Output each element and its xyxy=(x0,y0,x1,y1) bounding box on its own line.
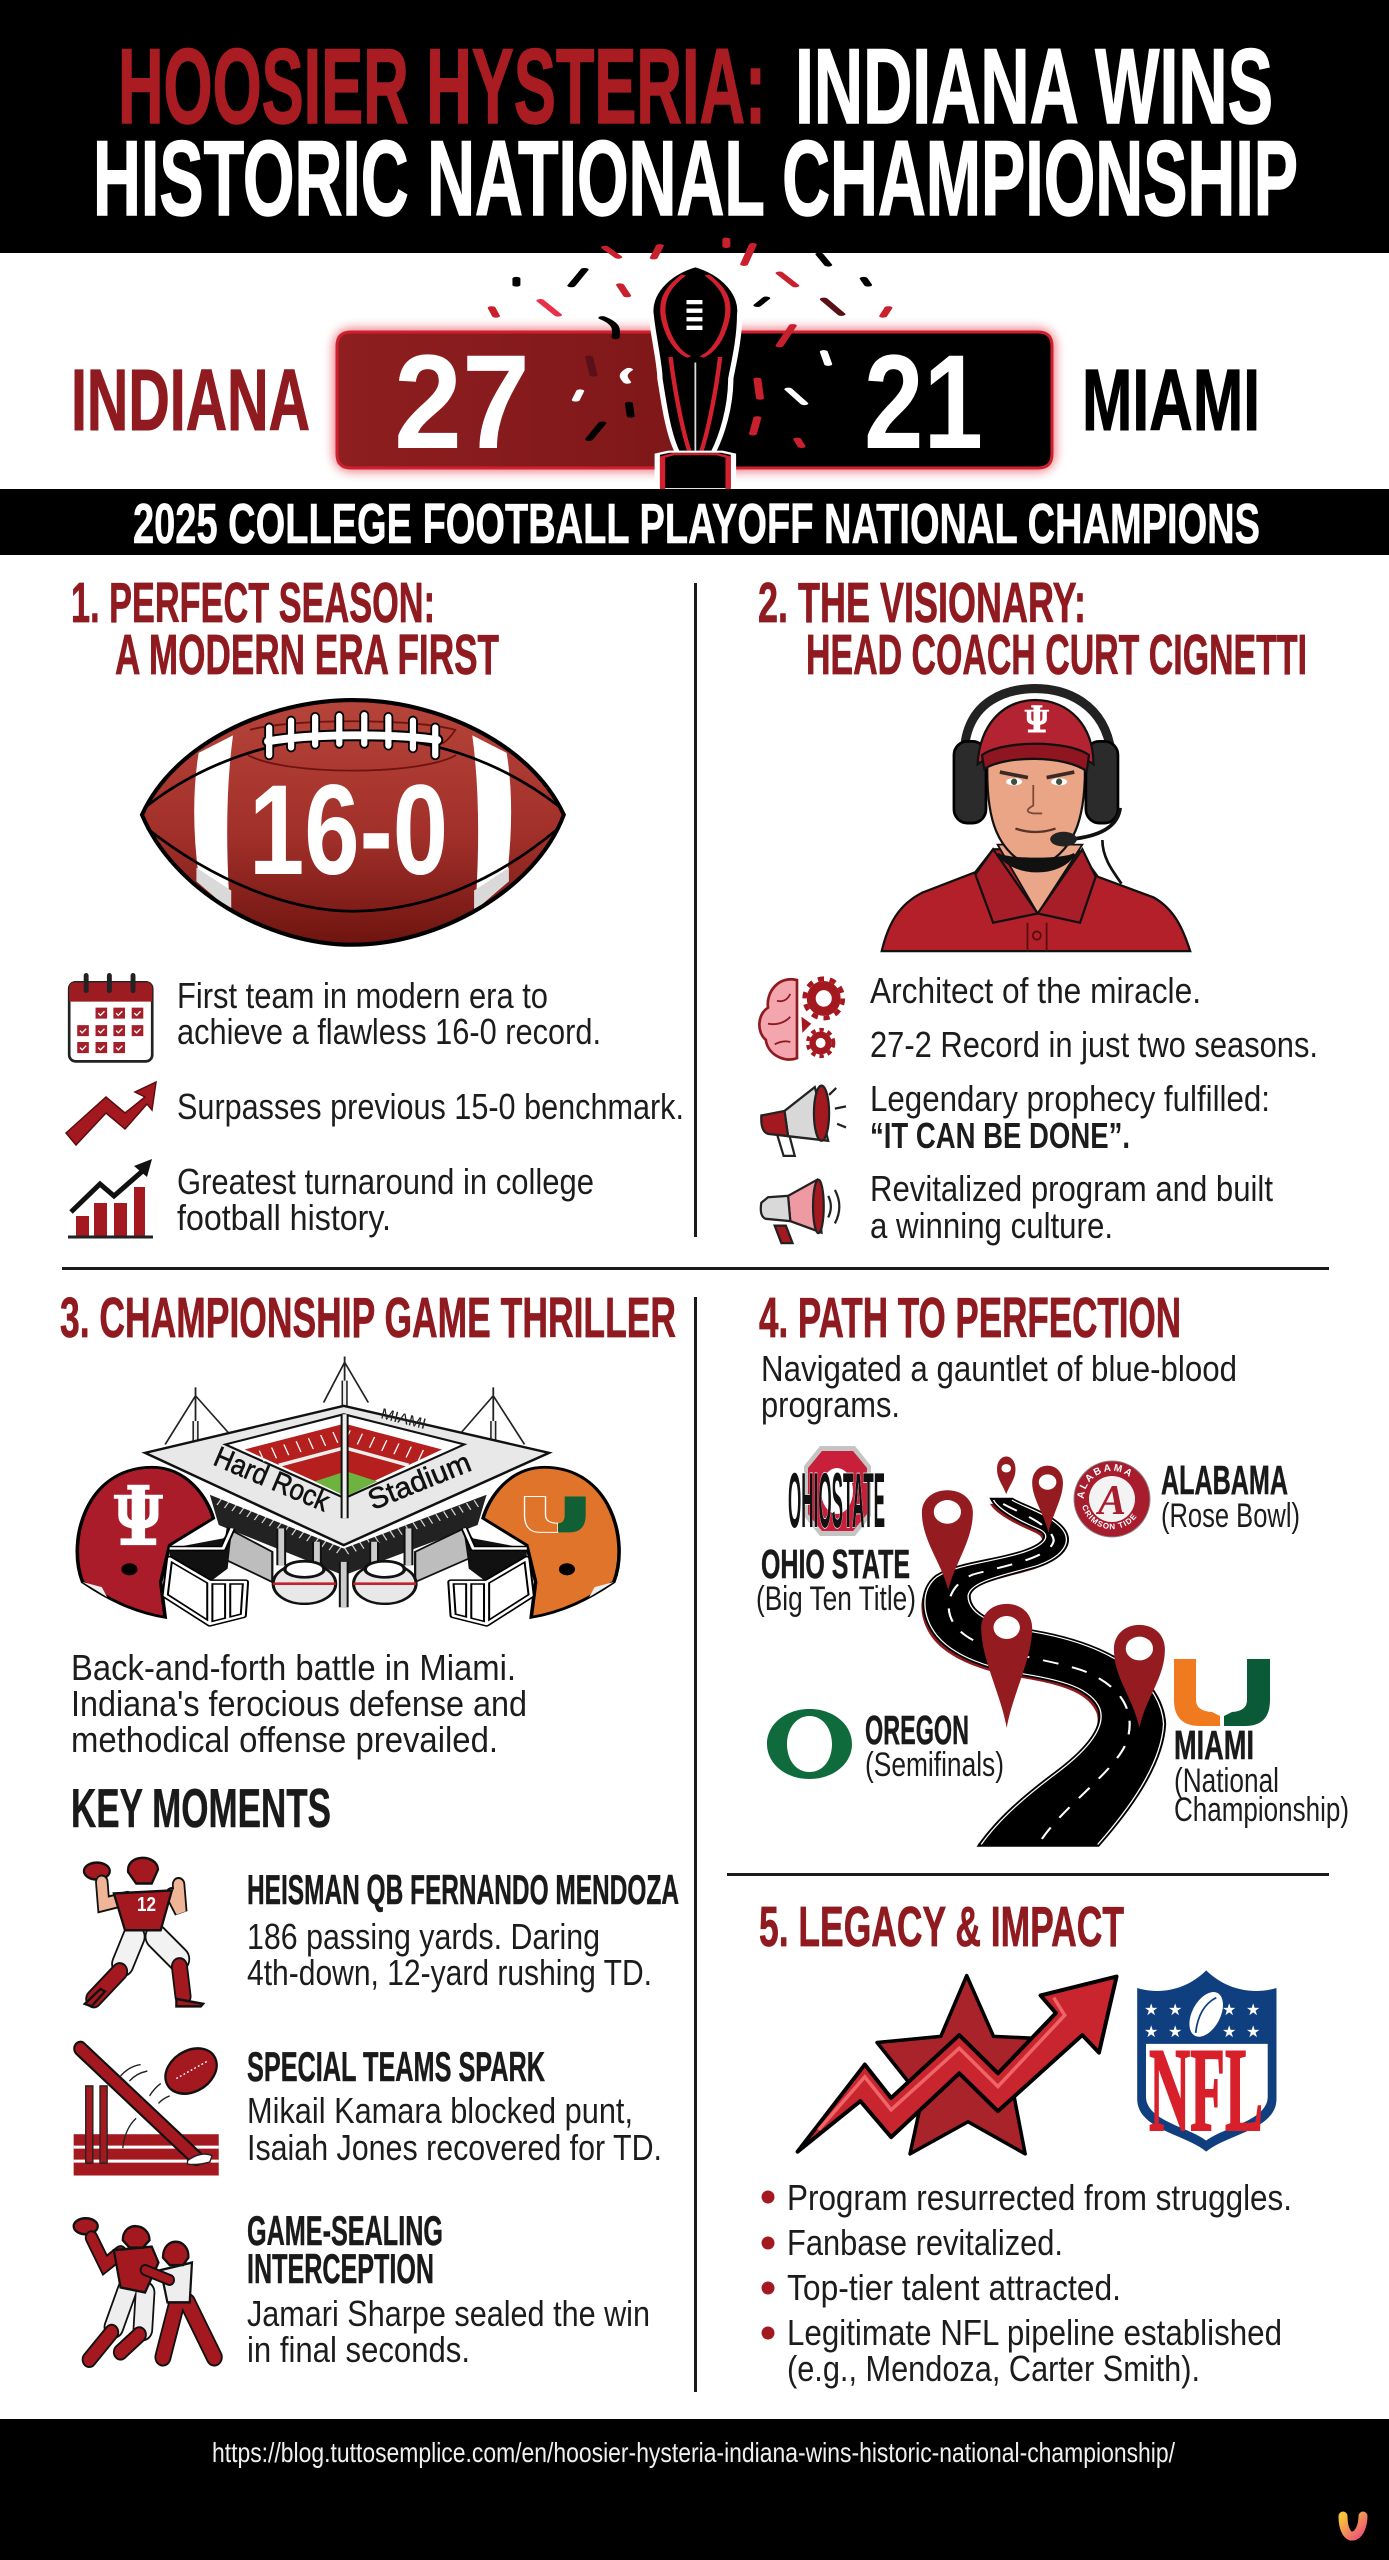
heading: key moments: KEY MOMENTS xyxy=(71,1777,331,1839)
text: revitalized: Revitalized program and built xyxy=(870,1168,1273,1209)
bullet list: Legitimate NFL pipeline established xyxy=(787,2312,1282,2353)
icon: interception players xyxy=(74,2218,214,2360)
logo: Alabama: A xyxy=(1095,1478,1126,1524)
icon: rising arrow xyxy=(66,1082,156,1145)
bullet list: Top-tier talent attracted. xyxy=(787,2267,1121,2308)
icon: bar chart with arrow xyxy=(68,1159,153,1237)
header: title band: HOOSIER HYSTERIA: xyxy=(118,26,766,146)
text: gauntlet: Navigated a gauntlet of blue-blood xyxy=(761,1348,1237,1389)
label: Oregon: OREGON xyxy=(865,1707,969,1753)
label: Alabama: ALABAMA xyxy=(1161,1457,1288,1503)
heading: section 1: A MODERN ERA FIRST xyxy=(115,623,499,687)
text: first team: achieve a flawless 16-0 record. xyxy=(177,1011,601,1052)
moment: Heisman QB: 186 passing yards. Daring xyxy=(247,1916,600,1957)
illustration: stadium and helmets xyxy=(77,1357,619,1624)
icon: football 16-0 xyxy=(142,700,564,945)
panel: championship game thriller xyxy=(60,1286,679,2370)
label: Miami xyxy=(1174,1722,1349,1829)
text: prophecy xyxy=(870,1078,1270,1156)
text: revitalized: a winning culture. xyxy=(870,1205,1113,1246)
moment: game-sealing interception: in final seconds. xyxy=(247,2329,470,2370)
label: Alabama xyxy=(1161,1457,1300,1535)
logo: NFL shield: ★ xyxy=(1168,2024,1182,2041)
label: Ohio State: OHIO STATE xyxy=(761,1541,910,1587)
label: Miami: (National xyxy=(1174,1762,1279,1800)
logo: NFL shield: ★ xyxy=(1168,2002,1182,2019)
score: 21: 21 xyxy=(864,328,983,477)
logo: NFL shield: ★ xyxy=(1222,2002,1236,2019)
moment: special teams: SPECIAL TEAMS SPARK xyxy=(247,2043,545,2090)
text: prophecy: “IT CAN BE DONE”. xyxy=(870,1115,1130,1156)
logo: NFL shield xyxy=(1137,1970,1276,2156)
football score 16-0: 16-0 xyxy=(249,759,448,902)
jersey number 12: 12 xyxy=(137,1894,156,1916)
road map with pins xyxy=(921,1457,1165,1844)
stadium name: Hard Rock: Hard Rock xyxy=(209,1441,334,1518)
heading: section 5: 5. LEGACY & IMPACT xyxy=(759,1895,1124,1959)
header: title band xyxy=(0,0,1389,253)
red helmet facemask xyxy=(165,1528,246,1624)
masts xyxy=(165,1357,525,1453)
icon: star with rising arrow xyxy=(798,1976,1117,2154)
icon: corner logo xyxy=(1343,2516,1363,2536)
text: game summary: Indiana's ferocious defense and xyxy=(71,1683,527,1724)
scoreboard xyxy=(71,239,1260,489)
team name: Miami: MIAMI xyxy=(1082,352,1260,449)
icon: megaphone with rays xyxy=(761,1086,846,1156)
bullet list xyxy=(762,2177,1292,2389)
text: gauntlet: programs. xyxy=(761,1384,900,1425)
text: record: 27-2 Record in just two seasons. xyxy=(870,1024,1318,1065)
red helmet dome xyxy=(77,1467,213,1617)
label: Oregon xyxy=(865,1707,1004,1784)
text: greatest turnaround: Greatest turnaround in college xyxy=(177,1161,594,1202)
text: game summary: methodical offense prevailed. xyxy=(71,1719,498,1760)
confetti xyxy=(492,239,888,446)
moment: game-sealing interception: INTERCEPTION xyxy=(247,2245,434,2292)
score box: Miami side xyxy=(695,332,1052,468)
logo: NFL shield: ★ xyxy=(1222,2024,1236,2041)
bullet list: (e.g., Mendoza, Carter Smith). xyxy=(787,2348,1200,2389)
moment: special teams: Mikail Kamara blocked punt, xyxy=(247,2090,633,2131)
heading: section 1 xyxy=(71,571,499,687)
dividers xyxy=(62,583,1329,2392)
logo: NFL shield: ★ xyxy=(1144,2002,1158,2019)
Miami sign on stadium: MIAMI xyxy=(379,1405,428,1433)
text: first team xyxy=(177,975,601,1052)
text: architect: Architect of the miracle. xyxy=(870,970,1201,1011)
icon: brain and gears xyxy=(759,979,843,1060)
stadium underside xyxy=(210,1495,487,1575)
logo: Miami U xyxy=(1174,1659,1270,1726)
score: 27: 27 xyxy=(394,328,530,477)
moment: Heisman QB xyxy=(247,1866,679,1993)
panel: the visionary xyxy=(758,571,1318,1246)
logo: NFL shield: ★ xyxy=(1144,2024,1158,2041)
panel: path to perfection: OHIOSTATE xyxy=(788,1456,885,1544)
label: Ohio State: (Big Ten Title) xyxy=(756,1580,916,1618)
moment: Heisman QB: 4th-down, 12-yard rushing TD. xyxy=(247,1952,652,1993)
panel: path to perfection xyxy=(756,1286,1349,1847)
logo: Alabama xyxy=(1074,1460,1150,1538)
score box: Indiana side xyxy=(337,332,695,468)
footer xyxy=(0,2419,1389,2560)
bullet list: Program resurrected from struggles. xyxy=(787,2177,1292,2218)
panel: legacy and impact xyxy=(759,1895,1292,2389)
logo: NFL shield: ★ xyxy=(1246,2002,1260,2019)
moment: special teams: Isaiah Jones recovered for TD. xyxy=(247,2127,662,2168)
team name: Indiana: INDIANA xyxy=(71,352,310,449)
stadium name: Stadium: Stadium xyxy=(364,1447,476,1517)
logo: Alabama: ALABAMA xyxy=(1077,1464,1131,1499)
text: game summary: Back-and-forth battle in Miami. xyxy=(71,1647,516,1688)
text: gauntlet xyxy=(761,1348,1237,1425)
text: game summary xyxy=(71,1647,527,1760)
moment: Heisman QB: HEISMAN QB FERNANDO MENDOZA xyxy=(247,1866,679,1913)
icon: calendar xyxy=(69,975,152,1061)
score box glow xyxy=(333,328,1056,472)
moment: game-sealing interception: Jamari Sharpe sealed the win xyxy=(247,2293,650,2334)
label: Ohio State xyxy=(756,1541,916,1618)
logo: Oregon O xyxy=(767,1709,852,1779)
parking rings xyxy=(273,1564,416,1604)
label: Oregon: (Semifinals) xyxy=(865,1746,1004,1784)
moment: special teams xyxy=(247,2043,662,2168)
text: revitalized xyxy=(870,1168,1273,1246)
orange helmet facemask xyxy=(451,1528,531,1624)
icon: megaphone with sound waves xyxy=(761,1180,839,1243)
text: first team: First team in modern era to xyxy=(177,975,548,1016)
icon: quarterback xyxy=(84,1858,203,2006)
bullet list: Fanbase revitalized. xyxy=(787,2222,1063,2263)
text: greatest turnaround: football history. xyxy=(177,1197,391,1238)
text: greatest turnaround xyxy=(177,1161,594,1238)
panel: perfect season xyxy=(66,571,684,1238)
illustration: coach with headset xyxy=(882,689,1190,951)
moment: game-sealing interception xyxy=(247,2207,650,2370)
heading: section 2 xyxy=(758,571,1307,687)
logo: Alabama: CRIMSON TIDE xyxy=(1082,1505,1137,1530)
heading: section 1: 1. PERFECT SEASON: xyxy=(71,571,435,635)
heading: section 2: 2. THE VISIONARY: xyxy=(758,571,1086,635)
logo: NFL shield: ★ xyxy=(1246,2024,1260,2041)
stadium roof xyxy=(145,1406,549,1545)
label: Alabama: (Rose Bowl) xyxy=(1161,1497,1300,1535)
icon: championship trophy xyxy=(651,266,740,489)
heading: section 3: 3. CHAMPIONSHIP GAME THRILLER xyxy=(60,1286,676,1350)
icon: blocked punt xyxy=(74,2040,223,2176)
orange helmet dome xyxy=(483,1467,619,1617)
logo: NFL shield: NFL xyxy=(1149,2023,1263,2156)
text: surpasses: Surpasses previous 15-0 benchmark. xyxy=(177,1086,684,1127)
source URL: https://blog.tuttosemplice.com/en/hoosier-hysteria-indiana-wins-historic-national-championship/ xyxy=(212,2437,1175,2468)
logo: Ohio State xyxy=(788,1446,885,1544)
moment: game-sealing interception: GAME-SEALING xyxy=(247,2207,443,2254)
label: Miami: MIAMI xyxy=(1174,1722,1254,1768)
text: prophecy: Legendary prophecy fulfilled: xyxy=(870,1078,1270,1119)
